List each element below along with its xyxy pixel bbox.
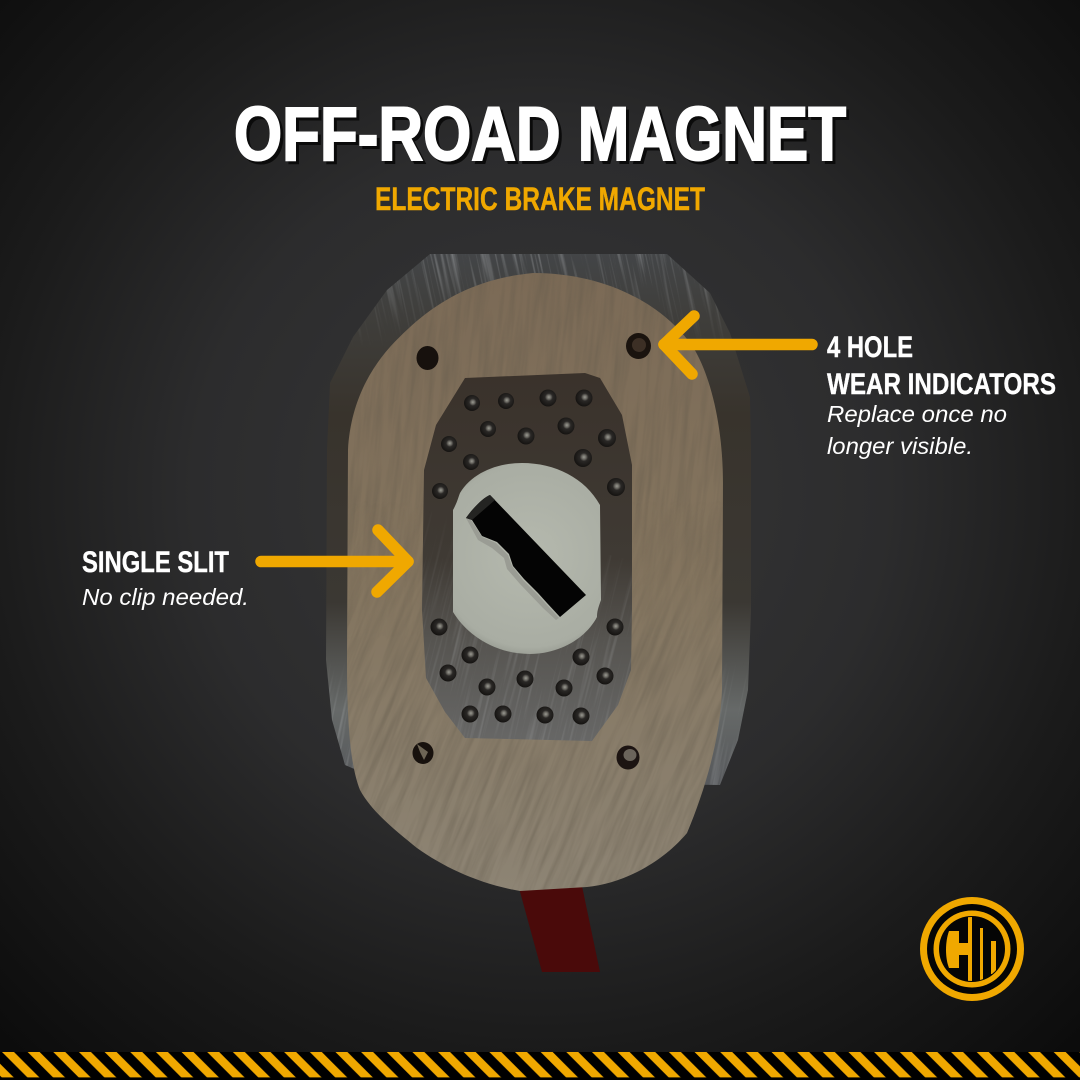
icon: CM logo [920, 897, 1024, 1001]
wear indicator holes [412, 333, 651, 770]
arrow: to single slit [261, 530, 408, 592]
callout: single slit [82, 546, 249, 610]
subtitle: ELECTRIC BRAKE MAGNET [375, 181, 705, 217]
callout: single slit: No clip needed. [82, 584, 249, 610]
callout: 4 hole wear indicators: Replace once no [827, 401, 1007, 427]
magnet photo [326, 254, 751, 891]
title: OFF-ROAD MAGNET [237, 95, 849, 180]
callout: single slit: SINGLE SLIT [82, 546, 229, 579]
rivets [430, 390, 625, 724]
metal shell [326, 254, 751, 785]
arrow: to wear indicators [664, 316, 812, 374]
title: OFF-ROAD MAGNET [234, 92, 846, 177]
friction lining [347, 273, 723, 891]
callout: 4 hole wear indicators [827, 331, 1056, 459]
callout: 4 hole wear indicators: longer visible. [827, 433, 973, 459]
slit [466, 495, 586, 620]
inner steel plate [422, 373, 632, 741]
wire: red lead [519, 886, 600, 972]
callout: 4 hole wear indicators: 4 HOLE [827, 331, 913, 364]
white core [453, 463, 601, 654]
hazard stripe band [0, 1052, 1080, 1080]
